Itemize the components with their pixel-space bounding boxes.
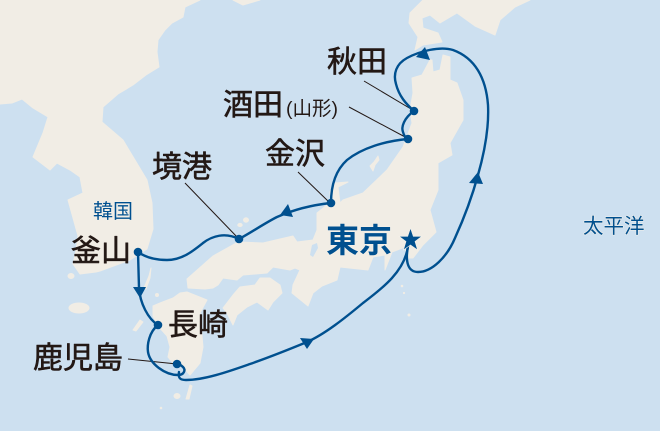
port markers — [134, 107, 418, 368]
lake: Biwa — [310, 243, 318, 257]
land: China and Korean peninsula — [0, 0, 200, 274]
arrow: eastbound off Shikoku — [300, 338, 314, 349]
arrow: toward Sakai — [280, 204, 293, 217]
land masses — [0, 0, 530, 409]
arrow: northbound off Honshu — [469, 172, 483, 184]
land: Kyushu — [153, 292, 207, 375]
land: Russian coast top — [233, 0, 260, 5]
arrow: westbound over Tsugaru strait — [416, 47, 430, 60]
label: Sakata (Yamagata): (山形) — [286, 98, 338, 120]
label: Sakata (Yamagata) — [223, 89, 338, 122]
icon: Tokyo star — [399, 228, 422, 250]
label: Kanazawa: 金沢 — [265, 138, 325, 171]
label: Kagoshima: 鹿児島 — [33, 342, 123, 375]
label: Sakata (Yamagata): 酒田 — [223, 89, 283, 122]
label: Korea: 韓国 — [93, 200, 133, 223]
label: Tokyo: 東京 — [326, 222, 392, 259]
cruise route line — [138, 49, 488, 380]
land: Honshu — [187, 55, 463, 306]
label: Nagasaki: 長崎 — [168, 309, 228, 342]
land: Hokkaido — [409, 0, 530, 50]
route direction arrows — [133, 47, 483, 349]
land: small islands — [68, 156, 410, 409]
label: Sakaiminato: 境港 — [152, 151, 212, 184]
arrow: south from Busan — [133, 287, 146, 298]
label: Pacific Ocean: 太平洋 — [583, 215, 644, 238]
land: Shikoku — [223, 278, 282, 325]
label: Akita: 秋田 — [327, 46, 387, 79]
leader lines — [128, 81, 411, 364]
label: Busan: 釜山 — [71, 235, 131, 268]
